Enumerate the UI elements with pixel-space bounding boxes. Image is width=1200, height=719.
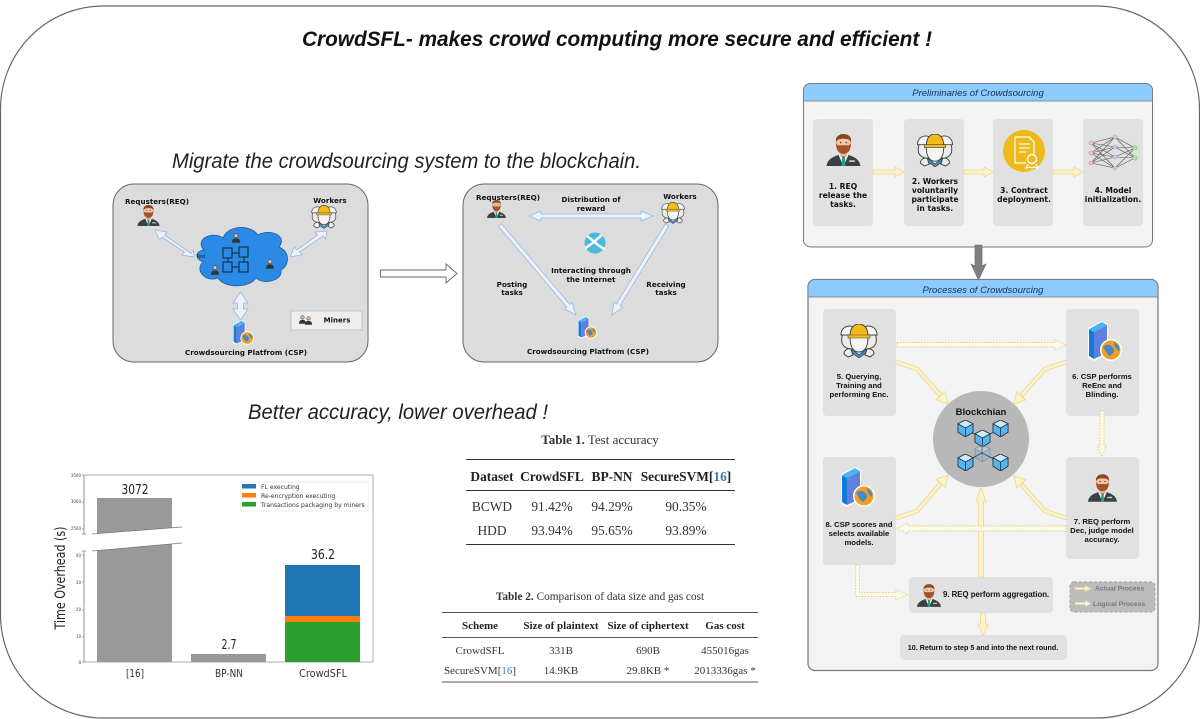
arrow: step 6 to step 7 logical (1098, 411, 1106, 457)
step 7 (1066, 457, 1139, 559)
step 6: 6. CSP performs (1072, 372, 1132, 381)
y tick labels: 40 (76, 553, 81, 558)
requester icon (487, 200, 506, 218)
process legend (1070, 582, 1155, 612)
step 5: 5. Querying, (837, 372, 881, 381)
value labels: 2.7 (222, 638, 236, 653)
bar: [16] (97, 498, 172, 662)
table 2: data size and gas cost: Size of ciphertext (607, 620, 689, 632)
arrow: step 1 to 2 (873, 167, 904, 177)
arrow: step 2 to 3 (964, 167, 993, 177)
y tick labels: 10 (76, 634, 81, 639)
step 6: ReEnc and (1082, 381, 1122, 390)
panel: processes of crowdsourcing (808, 280, 1158, 670)
miners legend (291, 311, 362, 330)
step 10 (900, 635, 1067, 660)
arrow: step 5 to step 6 logical (897, 340, 1066, 350)
miners legend: Miners (324, 316, 350, 324)
y tick labels: 2500 (71, 526, 81, 531)
arrow: posting tasks (498, 224, 576, 315)
title: CrowdSFL- makes crowd computing more secure and efficient ! (302, 28, 932, 51)
icon: neural network (1089, 135, 1137, 170)
step 5 (823, 309, 896, 416)
table 2: data size and gas cost: Gas cost (705, 620, 745, 632)
x labels: BP-NN (215, 667, 243, 680)
table 1: test accuracy: 95.65% (591, 523, 633, 538)
step 2: 2. Workers (912, 177, 959, 186)
table 1: test accuracy: Dataset (470, 469, 514, 484)
requester icon and label: Requsters(REQ) (125, 197, 189, 206)
platform label: Crowdsourcing Platfrom (CSP) (185, 348, 307, 357)
cloud with blockchain (196, 227, 288, 286)
step 2: in tasks. (917, 204, 953, 213)
table 2: data size and gas cost: 2013336gas * (694, 665, 756, 677)
table 2: data size and gas cost (442, 591, 758, 682)
step 9: 9. REQ perform aggregation. (943, 590, 1049, 599)
arrow: step 7 to blockchain (1014, 476, 1066, 518)
workers icon (662, 202, 684, 224)
platform label: Crowdsourcing Platfrom (CSP) (527, 347, 649, 356)
step 7: Dec, judge model (1070, 526, 1134, 535)
step 9 (909, 577, 1053, 613)
step 2: participate (912, 195, 958, 204)
arrow: step 3 to 4 (1053, 167, 1083, 177)
heading: migrate to blockchain: Migrate the crowdsourcing system to the blockchain. (172, 150, 641, 173)
bar: BP-NN (191, 654, 266, 662)
reward label: reward (577, 204, 605, 213)
panel: internet crowdsourcing system (463, 184, 718, 362)
table 1: test accuracy: 91.42% (531, 499, 573, 514)
posting label: Posting (497, 280, 527, 289)
step 7: 7. REQ perform (1074, 517, 1130, 526)
step 1: tasks. (830, 200, 856, 209)
panel title: Processes of Crowdsourcing (923, 285, 1044, 296)
y tick labels: 20 (76, 607, 81, 612)
platform icon (578, 316, 597, 339)
value labels: 3072 (122, 483, 148, 498)
step 4: initialization. (1085, 195, 1141, 204)
step 1 (813, 119, 873, 226)
step 8: models. (844, 538, 874, 547)
process legend: Actual Process (1095, 586, 1144, 592)
legend: FL executing (261, 484, 300, 491)
table 1: test accuracy: 93.89% (665, 523, 707, 538)
table 1: test accuracy: 90.35% (665, 499, 707, 514)
table 1: test accuracy: SecureSVM[16] (641, 469, 731, 484)
table 2: data size and gas cost: Table 2. Comparison of data size and gas cost (496, 591, 705, 603)
workers label: Workers (663, 192, 697, 201)
table 2: data size and gas cost: Scheme (462, 620, 498, 632)
workers icon and label: Workers (313, 196, 347, 205)
arrow: workers to chain (290, 231, 327, 257)
requester icon and label (125, 197, 189, 226)
table 2: data size and gas cost: SecureSVM[16] (444, 665, 516, 677)
panel header (808, 280, 1158, 297)
process legend: Logical Process (1093, 601, 1145, 608)
step 8 (823, 457, 896, 565)
table 2: data size and gas cost: Size of plaintext (523, 620, 599, 632)
value labels: 36.2 (311, 548, 335, 563)
arrow: receiving tasks (612, 224, 669, 315)
table 2: data size and gas cost: 690B (636, 645, 660, 657)
table 1: test accuracy: BCWD (472, 499, 512, 514)
arrow: preliminaries to processes (971, 245, 986, 280)
table 2: data size and gas cost: 331B (549, 645, 573, 657)
arrow: step 6 to blockchain (1014, 362, 1066, 404)
legend: Re-encryption executing (261, 493, 335, 500)
step 4 (1083, 119, 1143, 226)
y tick labels: 0 (78, 660, 81, 665)
internet label: Interacting through (551, 266, 631, 275)
table 1: test accuracy (466, 432, 735, 544)
y axis title: Time Overhead (s) (53, 526, 69, 630)
step 2 (904, 119, 964, 226)
x labels (126, 667, 348, 680)
y tick labels: 3000 (71, 499, 81, 504)
panel title: Preliminaries of Crowdsourcing (912, 88, 1044, 99)
y tick labels: 30 (76, 580, 81, 585)
icon: internet globe (584, 232, 606, 254)
step 1: 1. REQ (829, 182, 858, 191)
panel: blockchain crowdsourcing system (113, 184, 368, 362)
step 8: selects available (829, 529, 890, 538)
platform icon (233, 320, 254, 345)
step 6: Blinding. (1086, 390, 1118, 399)
table 1: test accuracy: Table 1. Test accuracy (541, 432, 659, 447)
panel header (804, 84, 1152, 101)
receiving label: tasks (655, 288, 677, 297)
table 2: data size and gas cost: 14.9KB (544, 665, 578, 677)
step 5: performing Enc. (830, 390, 888, 399)
table 1: test accuracy: CrowdSFL (520, 469, 584, 484)
step 3: 3. Contract (1000, 186, 1048, 195)
arrow: reward distribution (529, 211, 653, 221)
axis break (80, 475, 182, 662)
arrow: step 8 to blockchain (896, 475, 948, 518)
arrow: step 9 to step 10 (978, 613, 988, 636)
blockchain hub (933, 391, 1029, 487)
y tick labels (71, 473, 81, 665)
reward label: Distribution of (562, 195, 621, 204)
heading: better accuracy: Better accuracy, lower overhead ! (248, 401, 548, 424)
table 1: test accuracy: HDD (477, 523, 507, 538)
posting label: tasks (501, 288, 523, 297)
receiving label: Receiving (646, 280, 686, 289)
step 1: release the (819, 191, 867, 200)
arrow: transition between systems (380, 264, 457, 283)
step 3 (993, 119, 1053, 226)
y tick labels: 3500 (71, 473, 81, 478)
arrow: step 9 to blockchain (976, 487, 986, 577)
table 1: test accuracy: 93.94% (531, 523, 573, 538)
icon: contract seal (1003, 130, 1045, 172)
workers icon and label (312, 196, 347, 229)
cloud with blockchain: Text (196, 254, 206, 260)
arrow: platform to chain (233, 292, 248, 320)
step 8: 8. CSP scores and (826, 520, 893, 529)
blockchain hub: Blockchian (956, 407, 1007, 418)
legend: Transactions packaging by miners (260, 502, 365, 509)
step 3: deployment. (997, 195, 1051, 204)
table 1: test accuracy: BP-NN (592, 469, 633, 484)
step 5: Training and (836, 381, 882, 390)
value labels (122, 483, 335, 653)
arrow: step 7 to step 8 logical (897, 523, 1066, 534)
table 2: data size and gas cost: 29.8KB * (627, 665, 669, 677)
bar: CrowdSFL stacked (285, 565, 360, 662)
table 1: test accuracy: 94.29% (591, 499, 633, 514)
x labels: CrowdSFL (299, 667, 348, 680)
arrow: requester to chain (155, 230, 194, 257)
x labels: [16] (126, 667, 144, 680)
panel: preliminaries of crowdsourcing (804, 84, 1152, 247)
requester label: Requsters(REQ) (476, 193, 540, 202)
step 7: accuracy. (1085, 535, 1119, 544)
arrow: step 8 to step 9 logical (856, 565, 908, 600)
table 2: data size and gas cost: 455016gas (701, 645, 749, 657)
bar chart: time overhead (53, 473, 373, 680)
step 4: 4. Model (1095, 186, 1131, 195)
table 2: data size and gas cost: CrowdSFL (456, 645, 505, 657)
step 6 (1066, 309, 1139, 416)
internet label: the Internet (566, 275, 616, 284)
arrow: step 5 to blockchain (896, 362, 948, 404)
step 2: voluntarily (912, 186, 958, 195)
legend (241, 482, 369, 511)
step 10: 10. Return to step 5 and into the next round. (908, 643, 1058, 652)
